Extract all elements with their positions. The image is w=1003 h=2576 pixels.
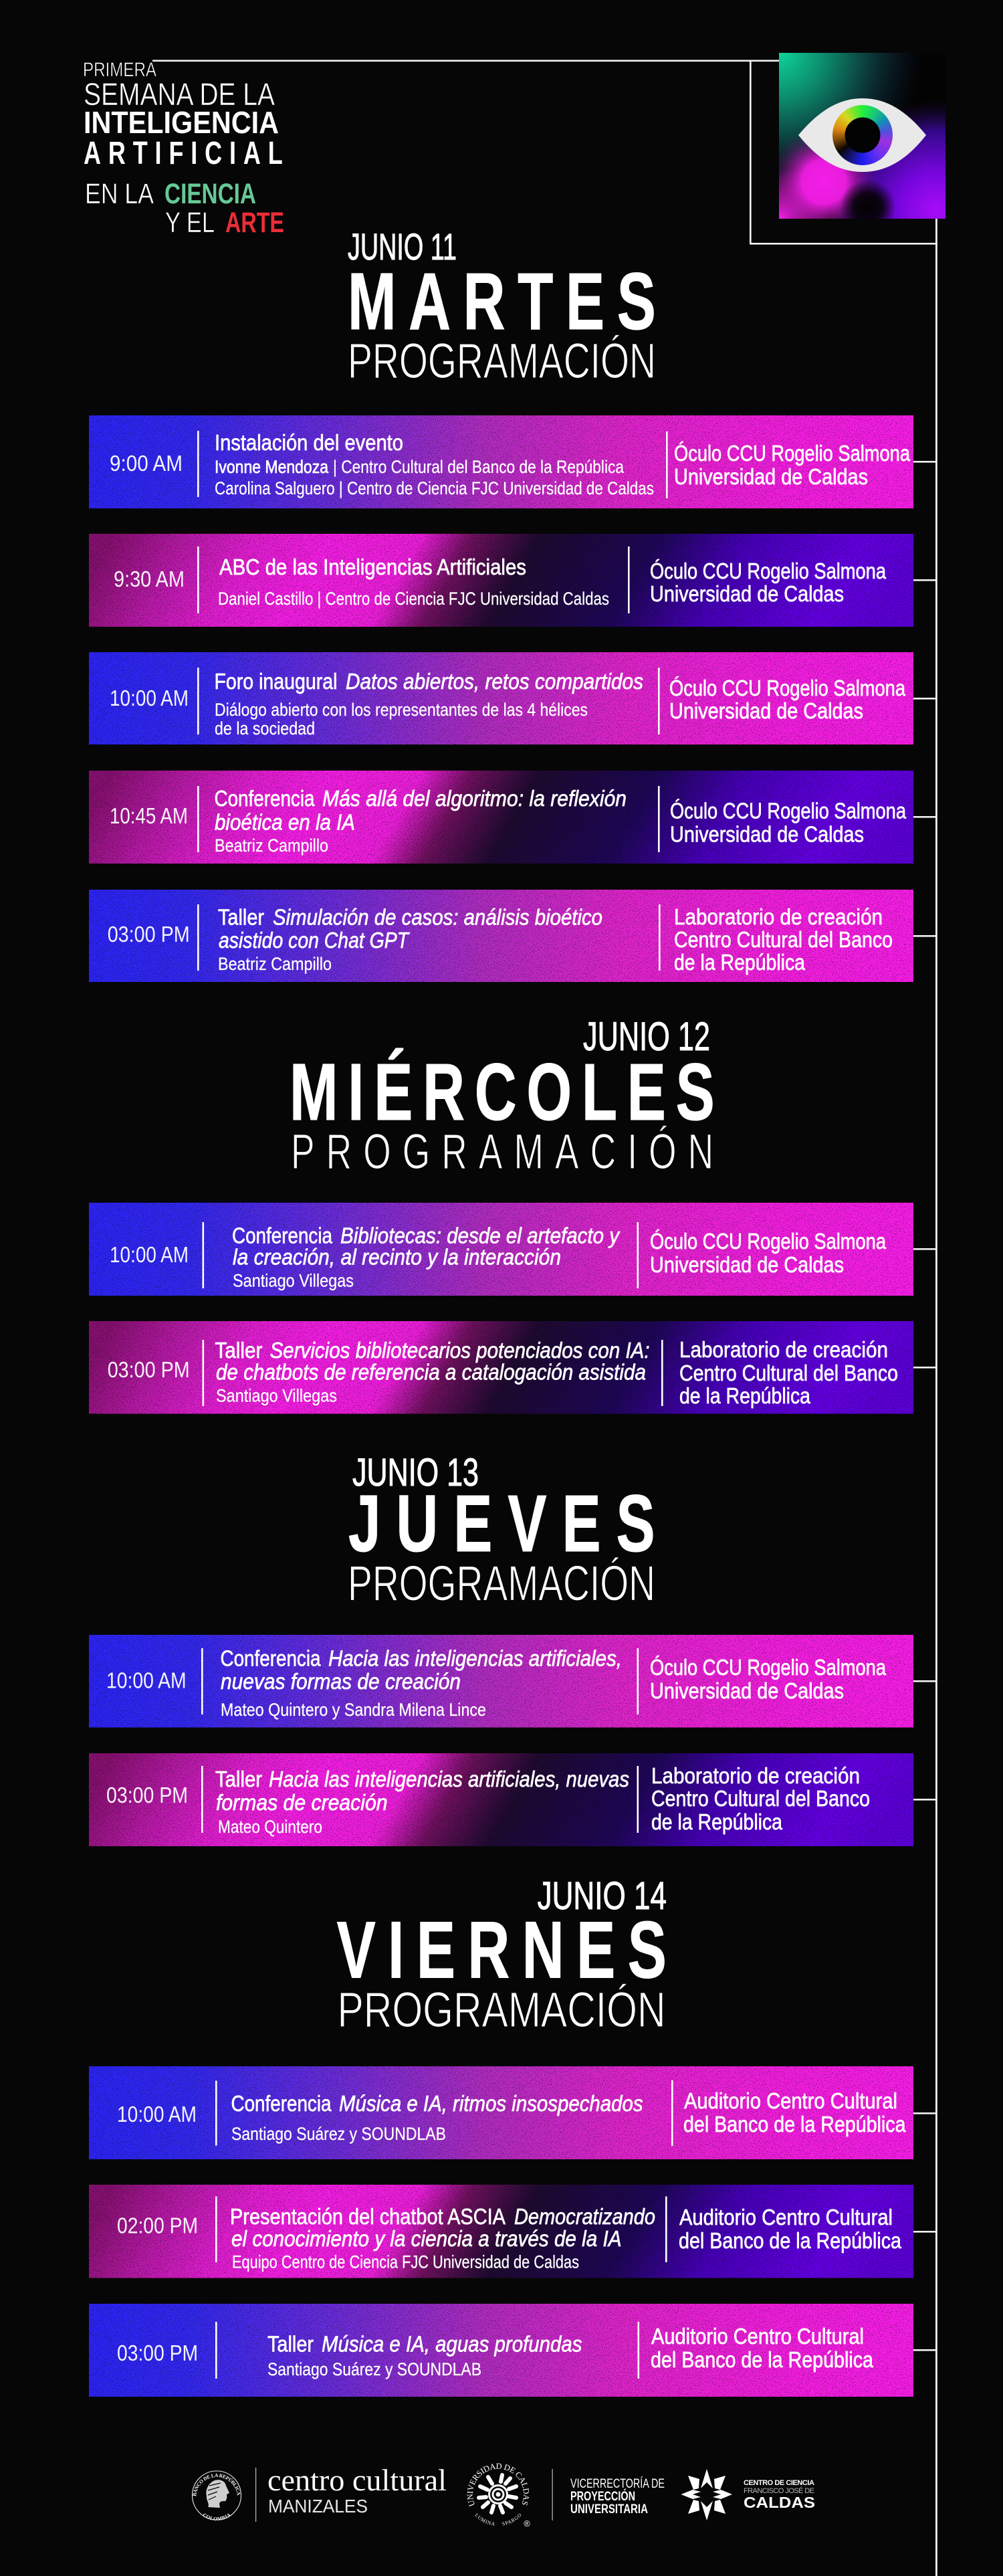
event bar: 10:45 AM — [89, 771, 913, 864]
event bar: 10:00 AM bibliotecas: Óculo CCU Rogelio Salmona — [650, 1229, 887, 1254]
event bar: 10:00 AM foro inaugural: Foro inaugural — [214, 670, 337, 694]
logo text: Vicerrectoría de Proyección Universitaria: PROYECCIÓN — [570, 2489, 635, 2504]
event bar: 02:00 PM chatbot ASCIA — [89, 2185, 913, 2278]
event bar: 10:00 AM foro inaugural — [89, 652, 913, 745]
event bar: 03:00 PM taller música e IA: Santiago Suárez y SOUNDLAB — [267, 2359, 481, 2379]
event bar: 03:00 PM taller servicios: Laboratorio de creación — [679, 1337, 888, 1362]
heading: Junio 12 Miércoles: PROGRAMACIÓN — [291, 1124, 713, 1179]
event title block: ARTE — [225, 207, 284, 239]
event bar: 10:00 AM hacia las inteligencias: Mateo Quintero y Sandra Milena Lince — [221, 1700, 486, 1720]
event bar: 10:45 AM: Universidad de Caldas — [670, 821, 864, 847]
event bar: 03:00 PM taller servicios: Santiago Villegas — [216, 1386, 337, 1406]
event bar: 02:00 PM chatbot ASCIA: Auditorio Centro Cultural — [679, 2205, 893, 2230]
event bar: 9:00 AM: Ivonne Mendoza — [215, 457, 328, 477]
logo text: centro cultural Manizales — [267, 2463, 447, 2516]
event bar: 03:00 PM taller servicios: Centro Cultural del Banco — [679, 1361, 898, 1385]
event bar: 02:00 PM chatbot ASCIA: Democratizando — [514, 2205, 655, 2230]
event bar: 03:00 PM taller simulación: Laboratorio de creación — [674, 904, 883, 929]
event bar: 03:00 PM taller música e IA — [89, 2304, 913, 2397]
event bar: 10:00 AM música e IA: Música e IA, ritmos insospechados — [339, 2092, 643, 2116]
event bar: 10:00 AM bibliotecas — [89, 1203, 913, 1296]
logo text: Vicerrectoría de Proyección Universitaria — [570, 2477, 665, 2516]
event bar: 03:00 PM taller simulación: Beatriz Campillo — [218, 954, 332, 974]
heading: Junio 13 Jueves: JUEVES — [348, 1479, 655, 1569]
event bar: 10:00 AM música e IA: Santiago Suárez y SOUNDLAB — [231, 2124, 446, 2144]
event bar: 10:00 AM bibliotecas: Universidad de Caldas — [650, 1252, 844, 1277]
event bar: 03:00 PM taller hacia las inteligencias — [89, 1753, 913, 1846]
event bar: 9:00 AM: Carolina Salguero | Centro de Ciencia FJC Universidad de Caldas — [215, 478, 654, 498]
event bar: 10:00 AM hacia las inteligencias: 10:00 AM — [106, 1668, 187, 1693]
heading: Junio 11 Martes: MARTES — [348, 257, 656, 346]
event bar: 9:30 AM — [89, 534, 913, 627]
event bar: 03:00 PM taller simulación: asistido con Chat GPT — [219, 928, 410, 953]
heading: Junio 14 Viernes: VIERNES — [337, 1906, 667, 1995]
logo text: Centro de Ciencia Francisco José de Caldas: FRANCISCO JOSÉ DE — [744, 2486, 814, 2495]
event bar: 10:00 AM foro inaugural: Diálogo abierto con los representantes de las 4 hélices — [215, 700, 588, 720]
event bar: 03:00 PM taller hacia las inteligencias: Centro Cultural del Banco — [651, 1786, 870, 1811]
event bar: 03:00 PM taller música e IA: Auditorio Centro Cultural — [651, 2324, 864, 2349]
event bar: 10:00 AM bibliotecas: Santiago Villegas — [233, 1271, 354, 1291]
event bar: 02:00 PM chatbot ASCIA: 02:00 PM — [117, 2213, 198, 2238]
event title block — [83, 59, 284, 239]
event bar: 03:00 PM taller servicios: de la República — [679, 1383, 811, 1408]
heading: Junio 11 Martes — [348, 225, 656, 389]
heading: Junio 12 Miércoles — [290, 1014, 715, 1179]
event bar: 10:00 AM foro inaugural: de la sociedad — [215, 718, 315, 738]
event bar: 03:00 PM taller servicios — [89, 1321, 913, 1414]
divider: centro cultural — [255, 2468, 256, 2522]
event bar: 03:00 PM taller servicios: de chatbots de referencia a catalogación asistida — [216, 1361, 646, 1385]
event bar: 03:00 PM taller hacia las inteligencias: Taller — [215, 1767, 262, 1792]
event bar: 9:30 AM: Daniel Castillo | Centro de Ciencia FJC Universidad Caldas — [218, 589, 609, 609]
event bar: 03:00 PM taller simulación: Simulación de casos: análisis bioético — [273, 906, 602, 930]
event bar: 10:00 AM bibliotecas: Bibliotecas: desde el artefacto y — [340, 1224, 621, 1249]
event bar: 10:00 AM hacia las inteligencias: Hacia las inteligencias artificiales, — [328, 1647, 622, 1671]
event bar: 10:00 AM foro inaugural: 10:00 AM — [110, 686, 189, 710]
timeline connector lines — [152, 60, 937, 2576]
event title block: EN LA — [85, 178, 154, 210]
event bar: 9:00 AM: | Centro Cultural del Banco de la República — [333, 457, 624, 477]
event bar: 02:00 PM chatbot ASCIA: del Banco de la República — [679, 2228, 902, 2253]
event bar: 9:00 AM: 9:00 AM — [110, 451, 183, 476]
logo text: Vicerrectoría de Proyección Universitaria: UNIVERSITARIA — [570, 2502, 648, 2516]
event bar: 03:00 PM taller hacia las inteligencias: 03:00 PM — [106, 1783, 188, 1807]
event bar: 10:00 AM bibliotecas: la creación, al recinto y la interacción — [233, 1246, 561, 1270]
event bar: 9:00 AM: Universidad de Caldas — [674, 464, 868, 489]
event bar: 9:30 AM: ABC de las Inteligencias Artificiales — [219, 555, 526, 580]
event bar: 10:45 AM: Conferencia — [214, 787, 315, 811]
logo: Banco de la República seal: BANCO DE LA REPÚBLICA — [193, 2474, 241, 2496]
event bar: 03:00 PM taller servicios: Taller — [215, 1339, 262, 1363]
event bar: 03:00 PM taller hacia las inteligencias: Mateo Quintero — [218, 1817, 322, 1837]
event bar: 10:00 AM bibliotecas: Conferencia — [232, 1224, 332, 1249]
event bar: 03:00 PM taller simulación: 03:00 PM — [108, 922, 190, 947]
event bar: 10:00 AM música e IA: del Banco de la República — [683, 2112, 906, 2137]
event bar: 10:00 AM hacia las inteligencias: Conferencia — [221, 1647, 321, 1671]
event bar: 03:00 PM taller servicios: 03:00 PM — [108, 1357, 190, 1382]
event title block: INTELIGENCIA — [84, 105, 279, 140]
logo: Banco de la República seal — [191, 2471, 242, 2520]
event bar: 10:00 AM bibliotecas: 10:00 AM — [110, 1242, 189, 1267]
logo text: centro cultural Manizales: centro cultural — [267, 2463, 447, 2497]
event bar: 9:30 AM: 9:30 AM — [114, 567, 185, 591]
heading: Junio 12 Miércoles: JUNIO 12 — [583, 1014, 710, 1059]
event bar: 03:00 PM taller hacia las inteligencias: Laboratorio de creación — [651, 1763, 860, 1788]
heading: Junio 12 Miércoles: MIÉRCOLES — [290, 1048, 715, 1137]
event bar: 10:45 AM: Óculo CCU Rogelio Salmona — [670, 799, 907, 823]
event bar: 03:00 PM taller hacia las inteligencias: Hacia las inteligencias artificiales, nuevas — [269, 1767, 629, 1792]
divider: vicerrectoría — [552, 2469, 553, 2520]
heading: Junio 13 Jueves: PROGRAMACIÓN — [348, 1556, 655, 1611]
event bar: 10:00 AM foro inaugural: Datos abiertos, retos compartidos — [346, 670, 643, 694]
icon: eye on gradient square — [779, 53, 945, 219]
event bar: 10:00 AM foro inaugural: Universidad de Caldas — [669, 698, 863, 723]
logo text: centro cultural Manizales: MANIZALES — [268, 2496, 368, 2516]
event bar: 10:45 AM: Beatriz Campillo — [215, 835, 328, 856]
event title block: SEMANA DE LA — [84, 76, 275, 112]
event bar: 03:00 PM taller música e IA: 03:00 PM — [117, 2341, 198, 2365]
heading: Junio 11 Martes: PROGRAMACIÓN — [348, 333, 656, 389]
event bar: 10:00 AM hacia las inteligencias: Universidad de Caldas — [650, 1678, 844, 1703]
logo: Universidad de Caldas: LUMINA SPARGO — [475, 2513, 522, 2526]
event bar: 9:30 AM: Óculo CCU Rogelio Salmona — [650, 559, 887, 583]
event bar: 9:00 AM: Óculo CCU Rogelio Salmona — [674, 441, 911, 466]
heading: Junio 14 Viernes — [337, 1874, 667, 2038]
logo: Centro de Ciencia star — [681, 2469, 732, 2520]
event bar: 03:00 PM taller simulación: Taller — [218, 906, 264, 930]
event bar: 10:00 AM música e IA: 10:00 AM — [117, 2102, 197, 2126]
event bar: 10:00 AM hacia las inteligencias — [89, 1635, 913, 1727]
event title block: Y EL — [165, 207, 215, 239]
event bar: 03:00 PM taller hacia las inteligencias: de la República — [651, 1809, 783, 1834]
event bar: 03:00 PM taller simulación: de la República — [674, 950, 806, 975]
event bar: 10:45 AM: bioética en la IA — [215, 811, 355, 835]
event bar: 10:00 AM música e IA — [89, 2066, 913, 2159]
logo text: Centro de Ciencia Francisco José de Caldas: CENTRO DE CIENCIA — [744, 2479, 814, 2487]
event bar: 10:45 AM: Más allá del algoritmo: la reflexión — [322, 787, 627, 811]
event bar: 02:00 PM chatbot ASCIA: el conocimiento y la ciencia a través de la IA — [231, 2227, 622, 2252]
heading: Junio 14 Viernes: PROGRAMACIÓN — [337, 1982, 666, 2038]
event title block: CIENCIA — [164, 178, 256, 210]
logo text: Vicerrectoría de Proyección Universitaria: VICERRECTORÍA DE — [570, 2477, 665, 2491]
heading: Junio 11 Martes: JUNIO 11 — [348, 225, 457, 268]
logo: Universidad de Caldas: UNIVERSIDAD DE CALDAS — [467, 2463, 529, 2507]
event title block: ARTIFICIAL — [84, 135, 283, 171]
event bar: 03:00 PM taller simulación — [89, 890, 913, 982]
event bar: 03:00 PM taller música e IA: del Banco de la República — [651, 2347, 874, 2372]
event bar: 03:00 PM taller simulación: Centro Cultural del Banco — [674, 927, 893, 952]
event bar: 03:00 PM taller música e IA: Música e IA, aguas profundas — [322, 2333, 582, 2357]
event bar: 10:00 AM música e IA: Conferencia — [231, 2092, 332, 2116]
heading: Junio 13 Jueves: JUNIO 13 — [352, 1451, 479, 1494]
event bar: 02:00 PM chatbot ASCIA: Equipo Centro de Ciencia FJC Universidad de Caldas — [232, 2252, 579, 2272]
event bar: 10:00 AM hacia las inteligencias: nuevas formas de creación — [221, 1670, 461, 1694]
logo: Universidad de Caldas — [467, 2463, 530, 2529]
logo text: Centro de Ciencia Francisco José de Caldas — [744, 2479, 815, 2511]
event bar: 03:00 PM taller servicios: Servicios bibliotecarios potenciados con IA: — [270, 1339, 650, 1363]
event bar: 10:00 AM foro inaugural: Óculo CCU Rogelio Salmona — [669, 676, 906, 700]
event bar: 10:00 AM música e IA: Auditorio Centro Cultural — [684, 2088, 897, 2113]
event bar: 02:00 PM chatbot ASCIA: Presentación del chatbot ASCIA — [230, 2205, 506, 2230]
logo text: Centro de Ciencia Francisco José de Caldas: CALDAS — [744, 2494, 815, 2511]
heading: Junio 14 Viernes: JUNIO 14 — [538, 1874, 667, 1918]
event bar: 10:45 AM: 10:45 AM — [110, 803, 188, 828]
event title block: PRIMERA — [83, 59, 156, 81]
logo: Universidad de Caldas: ® — [524, 2518, 530, 2529]
logo: Banco de la República seal: COLOMBIA — [203, 2514, 231, 2520]
event bar: 9:00 AM: Instalación del evento — [215, 431, 403, 456]
event bar: 03:00 PM taller música e IA: Taller — [267, 2333, 314, 2357]
event bar: 10:00 AM hacia las inteligencias: Óculo CCU Rogelio Salmona — [650, 1655, 887, 1680]
heading: Junio 13 Jueves — [348, 1451, 655, 1611]
event bar: 03:00 PM taller hacia las inteligencias: formas de creación — [216, 1791, 388, 1815]
event bar: 9:00 AM — [89, 415, 913, 508]
event bar: 9:30 AM: Universidad de Caldas — [650, 581, 844, 606]
